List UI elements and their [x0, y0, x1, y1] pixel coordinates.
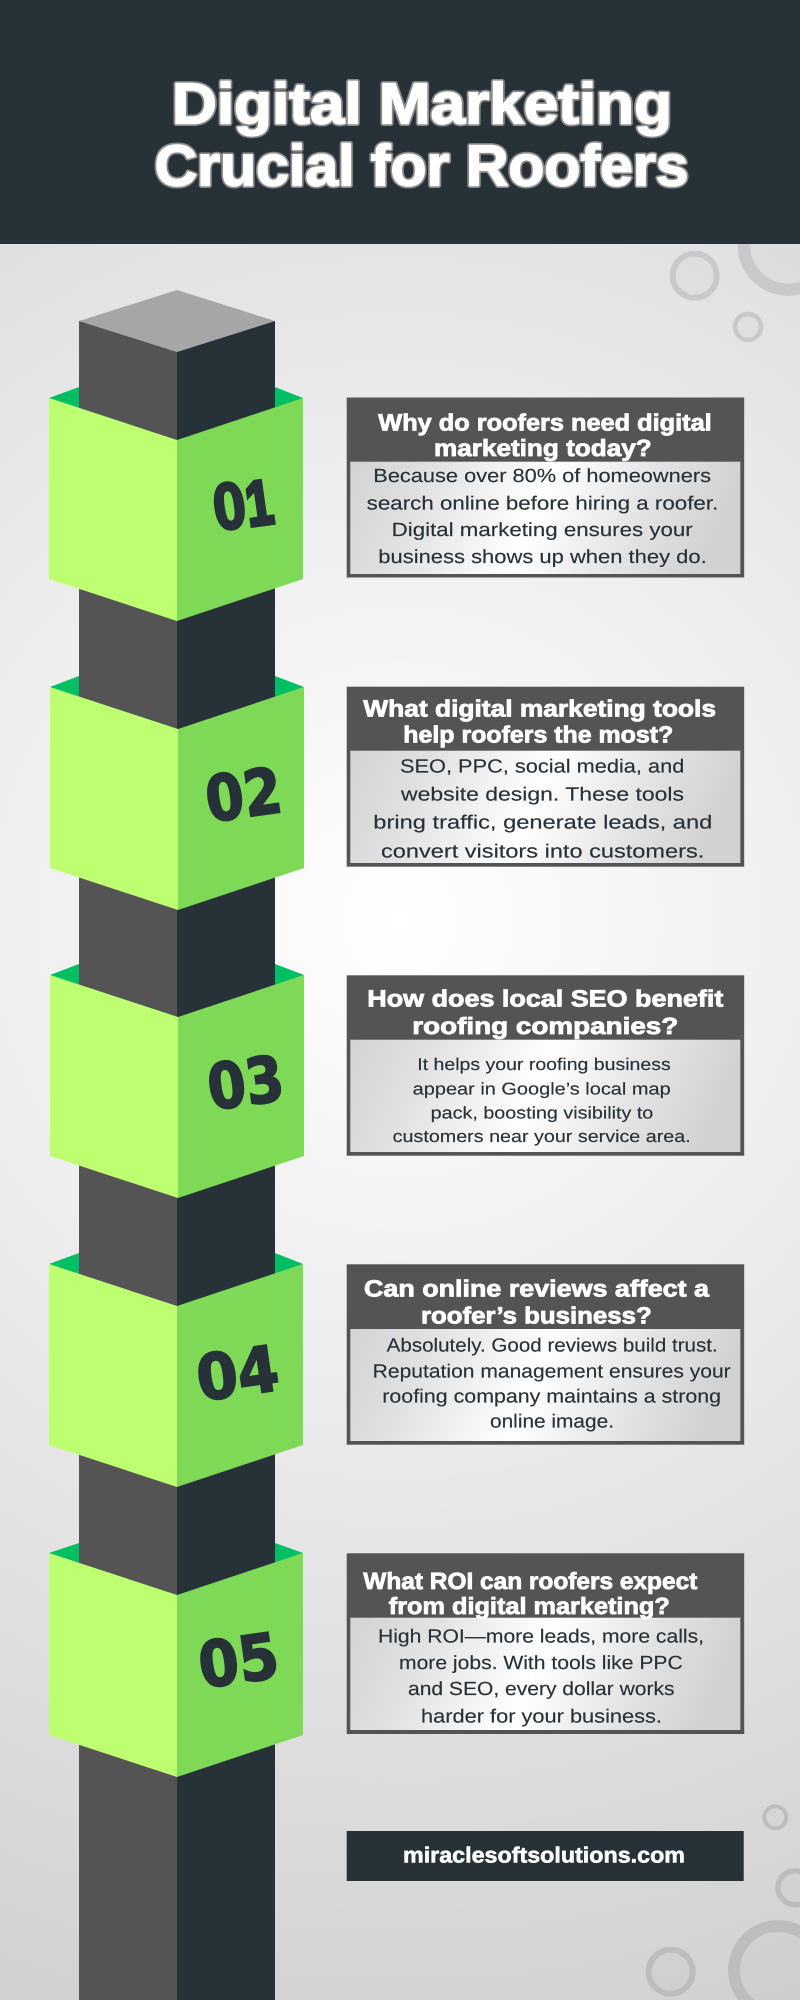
panel: question 4	[347, 1264, 744, 1445]
title: Crucial for Roofers	[155, 134, 689, 199]
panel: question 1	[347, 398, 744, 578]
panel: question 5	[347, 1553, 744, 1734]
question 4 answer: online image.	[490, 1411, 614, 1432]
question 2 heading: help roofers the most?	[403, 722, 673, 748]
title: Digital Marketing	[172, 72, 672, 137]
band 03	[50, 964, 304, 1198]
question 5 answer: and SEO, every dollar works	[408, 1679, 674, 1700]
panel: question 2	[347, 687, 744, 867]
question 5 heading	[363, 1568, 697, 1619]
question 4 answer	[373, 1336, 731, 1432]
title: Crucial for Roofers	[155, 134, 689, 199]
question 5 answer	[378, 1627, 704, 1727]
title	[155, 72, 689, 199]
question 5 answer: harder for your business.	[421, 1706, 662, 1727]
question 3 heading	[367, 986, 723, 1039]
footer website bar	[347, 1831, 744, 1881]
question 2 answer: convert visitors into customers.	[381, 842, 704, 863]
question 2 answer: bring traffic, generate leads, and	[373, 813, 712, 834]
question 1 answer	[367, 466, 718, 568]
decorative circles: top right	[673, 202, 800, 340]
number 02: 02	[201, 754, 286, 837]
band 01	[49, 387, 303, 621]
number 05: 05	[194, 1619, 283, 1703]
isometric column	[79, 290, 275, 2000]
question 2 answer	[373, 757, 712, 863]
question 3 answer: appear in Google’s local map	[413, 1079, 671, 1098]
question 1 answer: Digital marketing ensures your	[392, 520, 693, 541]
question 1 heading	[378, 410, 712, 461]
question 2 heading: What digital marketing tools	[363, 696, 716, 722]
question 3 answer: pack, boosting visibility to	[431, 1103, 653, 1122]
question 2 heading	[363, 696, 716, 748]
question 5 heading: What ROI can roofers expect	[363, 1568, 697, 1594]
question 1 heading: Why do roofers need digital	[378, 410, 712, 436]
number 04: 04	[192, 1332, 283, 1416]
question 4 answer: Absolutely. Good reviews build trust.	[387, 1336, 718, 1357]
header banner	[0, 0, 800, 244]
title: Digital Marketing	[172, 72, 672, 137]
question 4 answer: Reputation management ensures your	[373, 1361, 731, 1382]
number 01: 01	[208, 465, 278, 546]
question 5 answer: High ROI—more leads, more calls,	[378, 1627, 704, 1648]
question 1 answer: business shows up when they do.	[378, 547, 707, 568]
question 1 answer: search online before hiring a roofer.	[367, 493, 718, 514]
question 4 heading: roofer’s business?	[421, 1302, 652, 1328]
question 3 heading: How does local SEO benefit	[367, 986, 723, 1012]
question 5 answer: more jobs. With tools like PPC	[399, 1653, 683, 1674]
question 2 answer: website design. These tools	[400, 785, 684, 806]
number 03: 03	[203, 1042, 288, 1125]
decorative circles: bottom right	[649, 1806, 800, 2000]
question 4 heading	[364, 1276, 710, 1328]
question 3 answer: It helps your roofing business	[417, 1055, 671, 1074]
question 1 heading: marketing today?	[434, 435, 652, 461]
footer website bar: miraclesoftsolutions.com	[403, 1843, 685, 1868]
panel: question 3	[347, 975, 744, 1156]
question 4 answer: roofing company maintains a strong	[382, 1387, 721, 1408]
band 02	[50, 676, 304, 910]
question 3 heading: roofing companies?	[412, 1013, 678, 1039]
question 3 answer	[393, 1055, 691, 1146]
question 2 answer: SEO, PPC, social media, and	[400, 757, 684, 778]
band 05	[49, 1543, 303, 1777]
question 5 heading: from digital marketing?	[389, 1593, 670, 1619]
question 1 answer: Because over 80% of homeowners	[373, 466, 711, 487]
question 4 heading: Can online reviews affect a	[364, 1276, 710, 1302]
band 04	[49, 1253, 303, 1487]
question 3 answer: customers near your service area.	[393, 1127, 691, 1146]
